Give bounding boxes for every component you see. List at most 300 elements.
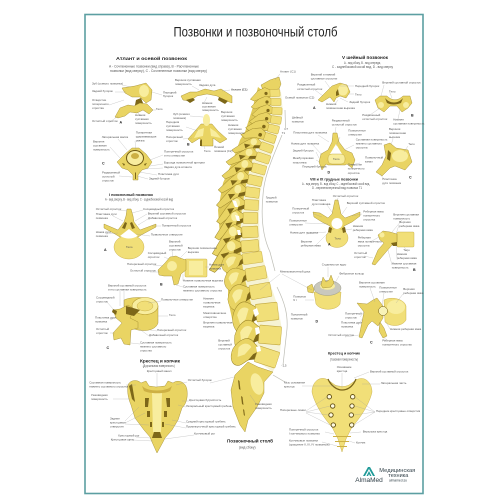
heading: VIII и IX грудные позвонки — [310, 177, 358, 182]
labels: вырезка — [389, 135, 400, 139]
labels: канал — [365, 159, 373, 163]
letters: D — [328, 170, 330, 174]
labels: отростка — [358, 244, 370, 248]
labels: отростка — [92, 106, 104, 110]
figure D: vertebra with intervertebral disc — [307, 275, 341, 309]
spine labels: Мыс основания — [284, 380, 305, 384]
leader lines — [106, 210, 209, 344]
labels: Верхушка крестца — [363, 429, 388, 433]
labels: Нижняя — [397, 252, 407, 256]
labels: Нижняя — [202, 101, 213, 105]
labels: позвоночная вырезка — [326, 106, 355, 110]
labels: крестцовые — [110, 420, 126, 424]
labels: пластинка — [293, 160, 307, 164]
labels: Отверстие — [92, 98, 107, 102]
labels: суставная поверхность — [393, 122, 425, 126]
labels: остистый — [102, 175, 115, 179]
letters: B — [160, 282, 163, 286]
labels: остистый отросток — [362, 117, 388, 121]
labels: Ножка дуги — [209, 263, 225, 267]
labels: ямка поперечного — [358, 240, 382, 244]
letters — [104, 248, 163, 350]
labels: Верхний и нижний — [311, 73, 336, 77]
spine labels: C7 — [284, 127, 288, 131]
labels: Копчиковый рог — [194, 431, 215, 435]
labels: и его отверстие — [164, 154, 185, 158]
labels — [95, 207, 225, 352]
labels: нижнего суставного — [140, 344, 167, 348]
labels: Позвоночное — [379, 285, 397, 289]
spine leader lines — [210, 74, 284, 405]
labels: реберная ямка — [397, 256, 417, 260]
labels: Крестцовый канал — [147, 369, 172, 373]
labels: Зуб (осевого — [173, 112, 190, 116]
labels: отросток — [354, 255, 366, 259]
posterior processes backing mass — [218, 87, 275, 345]
labels: Верхняя суставная — [175, 78, 201, 82]
labels: позвонка — [95, 319, 108, 323]
letters: B — [413, 268, 416, 272]
labels: Передний бугорок — [302, 165, 327, 169]
letters: A — [313, 106, 316, 110]
icon: logo mark — [363, 467, 375, 476]
labels: позвонка — [96, 216, 108, 220]
panel: sacrum dorsal surface — [89, 359, 236, 453]
letters: B — [187, 142, 190, 146]
description — [109, 64, 207, 73]
labels — [289, 194, 424, 347]
labels: отростка — [363, 217, 375, 221]
letters: C — [370, 340, 373, 344]
labels: отростка — [348, 171, 360, 175]
labels: связка — [136, 138, 145, 142]
spine labels: вырезка — [203, 324, 215, 328]
labels: Копчик — [356, 440, 366, 444]
labels: Атлант (C1) — [231, 88, 247, 92]
labels: реберная ямка — [301, 243, 321, 247]
labels: Раздвоенный — [297, 83, 316, 87]
labels: I копчикового позвонка — [289, 432, 320, 436]
letters: C — [102, 162, 105, 166]
labels: Позвоночный — [365, 155, 383, 159]
labels: отросток — [292, 210, 305, 214]
description: А - вид сверху, В - вид сбоку, С - заднебоковой косой вид — [105, 198, 173, 202]
labels: Остистый — [354, 251, 367, 255]
labels: нижнего суставного отростка — [89, 384, 129, 388]
labels: Раздвоенный — [362, 113, 381, 117]
spine labels: Поясничный — [291, 312, 308, 316]
labels: Ножка дуги — [96, 230, 111, 234]
spine labels: отросток — [218, 347, 231, 351]
labels: Передний — [163, 90, 177, 94]
labels: Раздвоенный — [102, 171, 120, 175]
figure A: side view — [318, 83, 350, 102]
labels: Верхний — [169, 240, 181, 244]
spine labels: Нижняя — [203, 296, 214, 300]
labels: Суставная поверхность — [356, 138, 388, 142]
figure B: side view — [372, 231, 414, 265]
labels: Раздвоенный — [332, 118, 350, 122]
labels: поверхность — [393, 216, 411, 220]
figure C: oblique view — [357, 298, 406, 338]
figure D: top view: Тело — [333, 157, 340, 161]
labels: Позвоночное — [348, 129, 366, 133]
spine labels: L5 — [283, 364, 287, 368]
labels: Средний крестцовый гребень — [186, 420, 226, 424]
labels: Поперечный отросток — [289, 428, 319, 432]
labels: Пластинка — [312, 198, 326, 202]
lumbar vertebrae — [220, 249, 282, 377]
sub-heading: (тазовая поверхность) — [330, 358, 358, 362]
labels: поверхность — [359, 284, 376, 288]
labels: Остистый отросток — [92, 119, 118, 123]
labels: Зуб (осевого позвонка) — [92, 82, 123, 86]
spine labels: T1 — [282, 131, 285, 135]
labels: Ушковидная — [91, 393, 108, 397]
labels: позвонка — [96, 234, 108, 238]
figure C: oblique view — [376, 143, 412, 176]
disc column — [240, 88, 283, 372]
labels: Задний бугорок — [92, 89, 114, 93]
labels: суставная — [202, 104, 216, 108]
labels: Сосцевидный — [148, 251, 167, 255]
brand tagline: Медицинская — [379, 468, 415, 474]
labels: Позвоночное отверстие — [161, 298, 193, 302]
brand tagline — [379, 468, 415, 482]
labels: Поперечная — [136, 130, 152, 134]
labels: Студенистое ядро — [322, 262, 347, 266]
spine labels: Ушковидная — [255, 402, 272, 406]
brand tagline: техника — [388, 473, 408, 479]
description: А - Сочлененные позвонки (вид справа), В - Расчлененные — [109, 64, 199, 68]
labels: Остистый отросток — [333, 194, 359, 198]
labels: позвонка) — [173, 116, 186, 120]
labels: Тело — [156, 107, 163, 111]
labels: остистый отросток — [332, 122, 357, 126]
labels: Поперечный — [292, 206, 309, 210]
figure A: top view — [104, 209, 156, 259]
logo: AlmaMed — [355, 467, 415, 484]
figure A: top view — [313, 200, 360, 248]
labels: отросток — [96, 299, 108, 303]
labels: поперечного — [363, 213, 380, 217]
leader lines — [302, 372, 380, 446]
heading: V шейный позвонок — [342, 54, 389, 60]
labels: поверхность — [175, 82, 192, 86]
labels: Нижняя — [326, 102, 337, 106]
labels: Борозда позвоночной артерии — [164, 161, 205, 165]
caption: spine: Позвоночный столб — [227, 438, 273, 444]
labels: отросток — [102, 179, 114, 183]
labels: Крестцовая бугристость — [189, 398, 222, 402]
labels: суставная — [221, 114, 235, 118]
labels: Остистый отросток — [130, 269, 156, 273]
sacrum and coccyx side view — [231, 362, 273, 432]
figure B: axis — [188, 114, 227, 146]
description: позвонки (вид сверху), С - Сочлененные позвонки (вид сверху) — [110, 69, 207, 73]
labels: Поперечный — [166, 135, 183, 139]
labels: Копчиковые позвонки — [289, 439, 318, 443]
description: С - заднебоковой косой вид, D - вид сверху — [332, 65, 393, 69]
labels: 9 т — [293, 298, 298, 302]
labels: реберная ямка — [399, 224, 420, 228]
labels: Тело — [389, 90, 396, 94]
labels: Промежуточный крестцовый гребень — [186, 425, 236, 429]
spine labels — [203, 70, 314, 410]
figure C: oblique view — [112, 298, 158, 345]
labels: Пластинка дуги — [158, 172, 179, 176]
labels: поперечного — [92, 102, 109, 106]
labels: Позвоночное отверстие — [151, 233, 183, 237]
spine labels: отверстие — [203, 315, 217, 319]
labels: реберная ямка — [403, 291, 424, 295]
labels: Реберная ямка — [363, 210, 384, 214]
labels: Остистый отросток — [96, 207, 122, 211]
labels: суставная — [166, 124, 180, 128]
labels: Латеральный крестцовый гребень — [186, 404, 232, 408]
labels: Верхняя — [301, 239, 312, 243]
labels: суставная — [228, 127, 242, 131]
labels: Тело — [169, 313, 176, 317]
labels: Отверстие — [348, 163, 362, 167]
description: А - вид сбоку, В - вид спереди, — [344, 61, 381, 65]
labels: Пластинка дуги — [96, 212, 117, 216]
panel: fifth cervical vertebra — [291, 54, 425, 185]
figure A: top view: Тело — [334, 236, 341, 240]
intervertebral foramina — [232, 200, 261, 352]
labels: удерживающая — [136, 134, 157, 138]
labels: Верхняя — [389, 127, 401, 131]
labels: поверхность — [93, 148, 110, 152]
labels: Суставная поверхность — [183, 284, 215, 288]
labels: Поперечный отросток — [162, 223, 192, 227]
labels: дуги позвонка — [382, 181, 401, 185]
labels: Поперечные линии — [280, 408, 306, 412]
labels: Верхняя суставная — [393, 213, 419, 217]
labels: Латеральная масса — [102, 135, 129, 139]
panel: first lumbar vertebra — [95, 192, 225, 352]
spine labels: Осевой позвонок (C2) — [285, 96, 314, 100]
labels: отросток — [96, 331, 108, 335]
letters: A — [328, 242, 331, 246]
atlas C1 — [261, 77, 281, 90]
sacrum pelvic drawing — [312, 378, 372, 452]
labels: Задний бугорок — [293, 149, 314, 153]
labels: Реберная ямка — [382, 339, 403, 343]
brand name: AlmaMed — [355, 477, 383, 484]
panel: spine lateral view — [207, 74, 287, 432]
labels: Поперечный отросток — [127, 262, 157, 266]
labels: отростка — [140, 348, 152, 352]
labels: поверхность — [91, 397, 108, 401]
spine labels: позвонок — [291, 316, 303, 320]
letters: C — [106, 346, 110, 350]
labels: поверхность — [135, 121, 152, 125]
labels: Суставная поверхность — [89, 380, 122, 384]
spine labels: Атлант (C1) — [280, 70, 296, 74]
letters: A — [120, 120, 122, 124]
spine labels: суставной — [218, 343, 232, 347]
figure A: articulated vertebrae side view — [115, 83, 153, 118]
labels: Нижняя — [393, 118, 404, 122]
spine labels: Межпозвоночный диск — [280, 270, 311, 274]
labels: нижнего суставного отростка — [183, 288, 222, 292]
caption: spine — [227, 438, 273, 449]
labels: Передний бугорок — [355, 84, 380, 88]
labels: Добавочный отросток — [149, 333, 179, 337]
labels: Задняя дуга — [199, 83, 216, 87]
labels: Верхний суставной отросток — [347, 201, 386, 205]
labels: отросток — [166, 139, 178, 143]
heading: Крестец и копчик — [328, 350, 360, 355]
labels: отверстие — [289, 222, 303, 226]
labels: Пластинка дуги позвонка — [293, 131, 327, 135]
leader lines — [109, 85, 230, 179]
labels: Пластинка дуги — [95, 315, 116, 319]
spine labels: позвоночная — [203, 300, 221, 304]
labels: отросток — [345, 315, 357, 319]
spine labels: Шейный — [292, 116, 303, 120]
labels: Основание — [337, 365, 352, 369]
labels: Нижняя — [228, 123, 239, 127]
labels: позвоночная — [389, 131, 406, 135]
labels: отростка — [356, 146, 368, 150]
labels: Латеральная часть — [381, 381, 407, 385]
spine labels: Верхний — [218, 339, 230, 343]
labels: дуги позвонка — [312, 202, 331, 206]
labels: Задний бугорок — [349, 100, 371, 104]
spine labels: вырезка — [203, 304, 215, 308]
spine labels: позвонок — [292, 120, 304, 124]
letters — [316, 242, 416, 344]
labels: Верхний суставной отросток — [370, 369, 409, 373]
labels: Пластинка дуги — [341, 320, 362, 324]
labels: Верхняя суставная — [359, 280, 385, 284]
labels: Верхняя позвоночная — [188, 246, 217, 250]
labels: Нижняя реберная ямка — [390, 327, 422, 331]
letters: B — [411, 114, 414, 118]
leader lines — [312, 81, 408, 179]
labels: Остистый отросток — [328, 333, 355, 337]
labels: крестца — [337, 369, 348, 373]
description: D - верхнепоперечный вид позвонка T1 — [312, 186, 362, 190]
labels: суставная — [93, 144, 107, 148]
thoracic vertebrae — [207, 131, 275, 273]
labels: Остистый бугорок — [188, 378, 212, 382]
labels: Позвонок — [293, 294, 307, 298]
heading: I поясничный позвонок — [109, 192, 153, 197]
description — [332, 61, 393, 69]
labels: (сращение II, III, IV позвонков) — [289, 443, 330, 447]
spine labels: Верхняя позвоночная — [203, 320, 233, 324]
labels: и его суставная поверхность — [108, 288, 147, 292]
labels: Верхняя — [221, 110, 233, 114]
labels: Поперечный отросток — [157, 328, 187, 332]
labels: позвонка — [341, 324, 354, 328]
labels: отверстие — [348, 133, 362, 137]
labels: поверхность — [228, 131, 245, 135]
labels: отросток — [169, 248, 181, 252]
labels: Пластинка — [382, 177, 397, 181]
labels: Верхний суставной отросток — [382, 80, 421, 84]
labels: Ножка дуги позвонка — [290, 231, 318, 235]
labels: Тело — [408, 142, 415, 146]
labels: Добавочный отросток — [148, 216, 178, 220]
letters — [313, 106, 414, 180]
leader lines — [113, 373, 194, 441]
figure C: articulated vertebrae top view — [117, 148, 152, 180]
labels: Поперечный — [345, 311, 362, 315]
labels: поверхность — [202, 108, 219, 112]
labels — [291, 73, 425, 185]
panel: sacrum pelvic surface — [280, 350, 421, 452]
labels: Верхняя — [399, 220, 411, 224]
labels: поперечного — [348, 167, 365, 171]
labels: Верхний суставной отросток — [108, 284, 147, 288]
sub-heading: (Дорзальная поверхность) — [143, 364, 175, 368]
labels: Передняя — [166, 120, 180, 124]
labels: Поперечный отросток — [164, 150, 194, 154]
panel: thoracic vertebrae — [282, 177, 424, 347]
description: А - вид сверху, В - вид сбоку, С - заднебоковой косой вид, — [302, 182, 370, 186]
labels: суставные отростки — [311, 77, 338, 81]
labels: Крестцовая щель — [111, 438, 135, 442]
labels: позвонка — [209, 267, 222, 271]
labels: Нижняя — [353, 224, 363, 228]
spine labels: крестца — [284, 384, 295, 388]
labels — [89, 369, 236, 442]
panel: atlas and axis — [92, 55, 247, 183]
labels: поверхность — [221, 118, 238, 122]
figure B: atlas top — [181, 89, 232, 104]
figure B: front view — [375, 96, 412, 112]
title: Позвонки и позвоночный столб — [174, 24, 338, 40]
labels: Нижняя позвоночная вырезка — [183, 278, 223, 282]
letters: C — [409, 176, 412, 180]
labels: Нижняя суставная — [392, 261, 417, 265]
spine labels: поверхность — [255, 406, 272, 410]
letters: A — [104, 248, 107, 252]
labels: Передние крестцовые отверстия — [376, 409, 421, 413]
labels: Позвоночное — [289, 218, 307, 222]
labels: Тело — [355, 92, 362, 96]
labels: бугорок — [163, 94, 174, 98]
labels: поверхность — [166, 128, 183, 132]
labels — [280, 365, 421, 447]
labels: поперечного отростка — [382, 343, 412, 347]
labels — [92, 78, 247, 183]
labels: Межбугорковая — [293, 156, 314, 160]
spine labels: Межпозвоночное — [203, 311, 227, 315]
description — [302, 182, 370, 190]
labels: Осевой — [214, 145, 224, 149]
labels: отверстие — [379, 289, 393, 293]
labels: суставная — [135, 117, 149, 121]
labels: Задняя дуга атланта — [164, 165, 192, 169]
labels: Ножка дуги позвонка — [291, 141, 319, 145]
labels: Нижняя — [135, 113, 146, 117]
labels: Сосцевидный отросток — [143, 207, 175, 211]
labels: Суставная поверхность — [140, 341, 172, 345]
labels: нижнего суставного — [356, 142, 382, 146]
poster frame — [85, 14, 423, 494]
labels: отросток — [148, 255, 160, 259]
letters — [102, 120, 190, 166]
labels: суставной — [169, 244, 183, 248]
labels: Верхний суставной отросток — [148, 211, 187, 215]
sacrum dorsal drawing — [128, 381, 187, 453]
caption: spine: (вид сбоку) — [239, 445, 256, 449]
